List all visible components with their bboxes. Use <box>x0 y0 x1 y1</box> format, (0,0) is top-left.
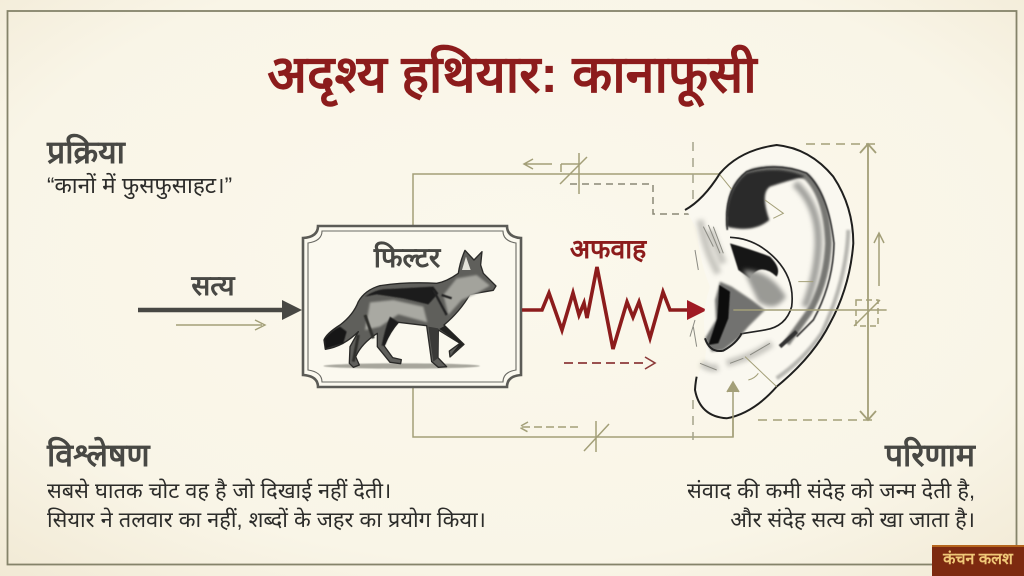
text block: analysis <box>46 436 486 532</box>
result line 1: संवाद की कमी संदेह को जन्म देती है, <box>687 478 975 503</box>
analysis line 1: सबसे घातक चोट वह है जो दिखाई नहीं देती। <box>47 478 391 503</box>
concha bowl <box>705 282 765 352</box>
logo: kanchan kalash: कंचन कलश <box>942 550 1014 568</box>
panel: filter <box>303 226 521 387</box>
heading: process: प्रक्रिया <box>46 133 127 170</box>
ear overlay arrow <box>727 382 739 437</box>
upper dark hollow <box>727 170 805 229</box>
label: truth: सत्य <box>190 270 236 301</box>
heading: result: परिणाम <box>884 436 977 473</box>
title: अदृश्य हथियार: कानाफूसी <box>267 44 759 108</box>
heading: analysis: विश्लेषण <box>46 436 151 473</box>
result line 2: और संदेह सत्य को खा जाता है। <box>730 507 975 532</box>
rumour signal <box>522 234 707 369</box>
label: filter: फिल्टर <box>373 241 442 273</box>
hatch lines <box>690 225 770 370</box>
arrow: into ear <box>687 300 707 320</box>
quote: “कानों में फुसफुसाहट।” <box>47 172 232 200</box>
analysis line 2: सियार ने तलवार का नहीं, शब्दों के जहर का प्रयोग किया। <box>47 507 486 532</box>
text block: result <box>687 436 977 532</box>
antihelix fold <box>730 237 792 334</box>
dashed arrow <box>564 362 648 364</box>
logo: kanchan kalash <box>932 545 1024 576</box>
soft outer shading <box>700 220 772 368</box>
feedback lines <box>413 142 884 452</box>
overlay construction marks <box>720 175 813 387</box>
input arrow: truth <box>138 270 302 330</box>
icon: ear <box>685 145 887 418</box>
label: rumour: अफवाह <box>570 234 647 264</box>
text block: process <box>46 133 232 200</box>
inner rim band <box>730 169 828 343</box>
waveform <box>522 267 688 349</box>
icon: jackal <box>323 250 496 369</box>
